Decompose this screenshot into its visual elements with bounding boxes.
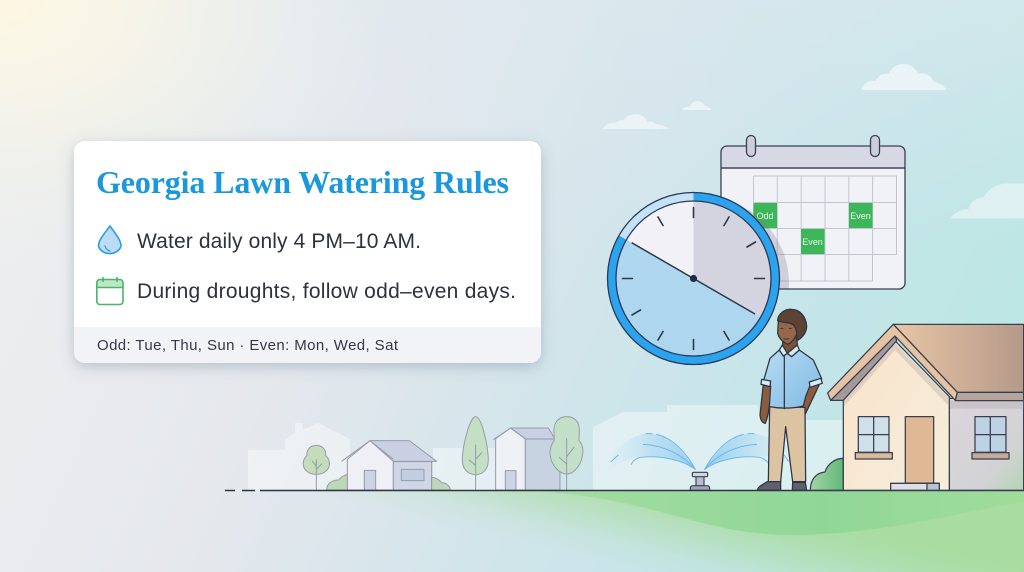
calendar day: even upper	[849, 203, 872, 228]
calendar day: even lower: Even	[802, 237, 823, 247]
clock	[608, 192, 780, 364]
calendar day: even lower	[801, 229, 824, 254]
icon: calendar	[97, 277, 123, 304]
shoes	[757, 482, 807, 490]
footnote: odd and even days: Odd: Tue, Thu, Sun · Even: Mon, Wed, Sat	[97, 337, 399, 354]
hair	[778, 309, 807, 341]
clouds	[602, 64, 1024, 218]
calendar day: odd: Odd	[756, 211, 774, 221]
trees	[303, 417, 583, 490]
distant town silhouettes	[248, 405, 843, 490]
clock ticks	[622, 208, 764, 350]
gable trim	[828, 324, 957, 400]
neck	[783, 333, 797, 353]
calendar	[720, 134, 906, 290]
info card	[74, 141, 541, 363]
house main roof	[893, 324, 1024, 392]
clock hands	[632, 243, 755, 314]
background house middle	[493, 428, 560, 490]
background house left	[327, 441, 450, 490]
left window	[855, 417, 892, 459]
bush beside house	[810, 458, 843, 490]
person	[757, 309, 822, 490]
sprinkler spray	[603, 433, 793, 478]
arms	[760, 384, 819, 423]
ground line	[225, 490, 1024, 492]
door	[905, 417, 934, 483]
right window	[972, 417, 1009, 459]
shirt details	[761, 345, 822, 387]
sprinkler head	[690, 472, 710, 490]
calendar day: odd	[754, 203, 777, 228]
facial features	[781, 328, 791, 339]
shirt	[764, 350, 822, 408]
door step	[891, 483, 939, 490]
icon: water drop	[98, 226, 121, 254]
rule: drought days: During droughts, follow odd–even days.	[137, 280, 516, 303]
face	[778, 318, 798, 344]
trousers	[768, 407, 806, 482]
gable shadow	[831, 336, 897, 400]
house front wall	[843, 341, 949, 490]
house	[810, 324, 1024, 490]
rule: watering hours: Water daily only 4 PM–10 AM.	[137, 230, 421, 253]
ground	[0, 490, 1024, 572]
calendar day: even upper: Even	[850, 211, 871, 221]
house side wing	[949, 398, 1024, 490]
card title: Georgia Lawn Watering Rules	[96, 164, 509, 200]
